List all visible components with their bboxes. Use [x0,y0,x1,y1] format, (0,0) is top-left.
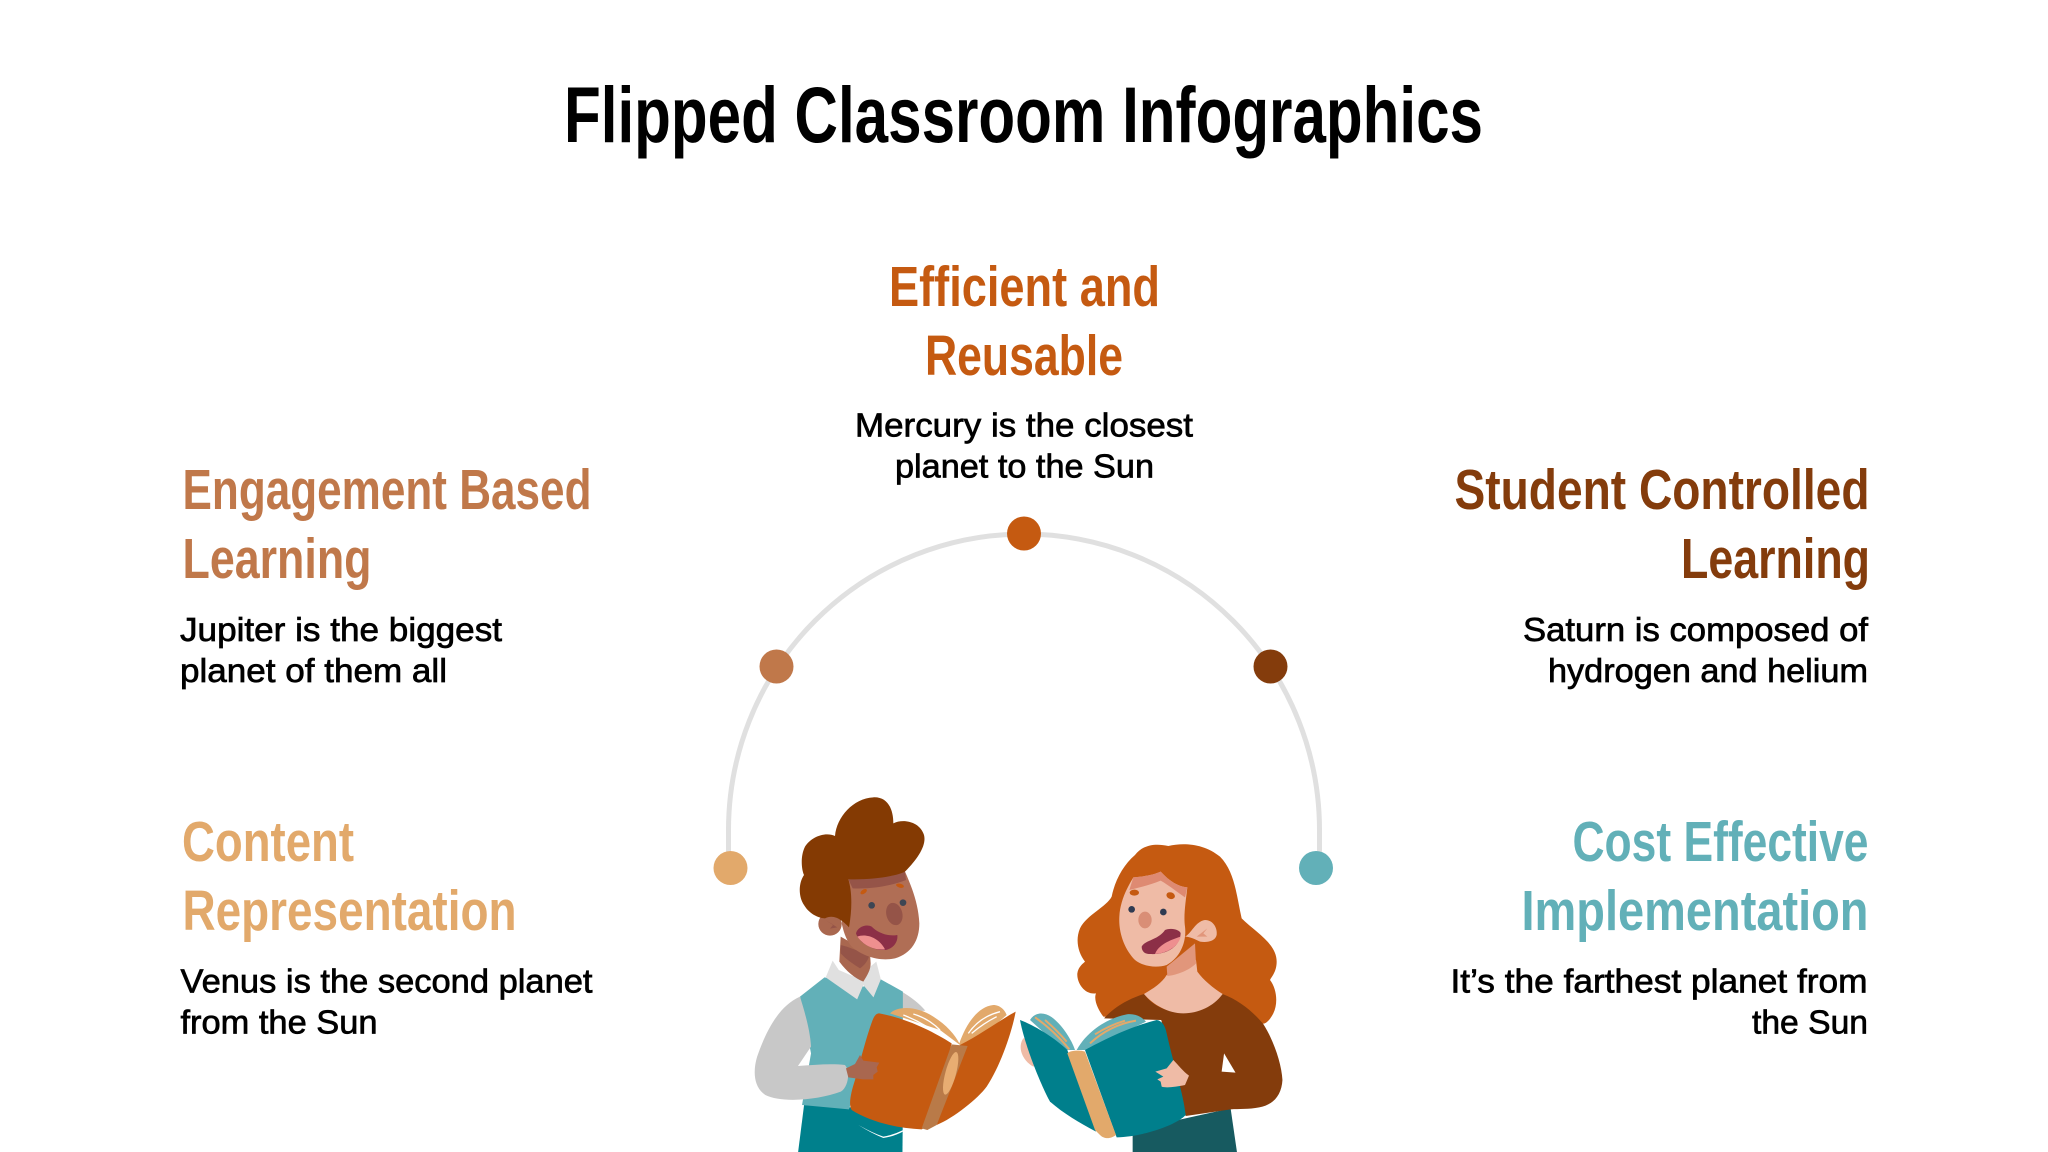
heading: efficient and reusable [889,255,1160,388]
dot: cost [1299,851,1333,885]
boy hand [846,1055,879,1079]
trouser crease [858,1125,903,1138]
heading: student controlled learning [1454,458,1870,591]
text: venus description: from the Sun [180,1004,378,1040]
teal book [1020,1014,1189,1138]
panel: engagement based learning [180,458,592,689]
illustration: two students reading [755,797,1282,1152]
heading: student controlled learning: Learning [1681,527,1870,591]
boy hair [800,797,924,927]
girl head [1119,872,1223,1013]
text: neptune description: the Sun [1752,1004,1868,1040]
heading: cost effective implementation [1522,810,1868,943]
text: neptune description: It’s the farthest planet from [1450,962,1868,1000]
text: jupiter description: Jupiter is the biggest [180,611,502,648]
boy nose [884,901,905,927]
girl hair [1077,844,1277,1024]
text: saturn description: hydrogen and helium [1548,652,1868,689]
girl nose [1138,912,1152,928]
text: saturn description: Saturn is composed of [1523,611,1869,648]
heading: engagement based learning [182,458,592,591]
book pages [890,1005,1007,1050]
girl left hand [1021,1038,1040,1067]
panel: content representation [180,810,592,1040]
book pages [1030,1014,1075,1050]
text: neptune description [1450,962,1868,1040]
panel: student controlled learning [1454,458,1870,689]
text: mercury description: Mercury is the closest [855,406,1193,444]
book spine [1067,1051,1116,1138]
text: jupiter description: planet of them all [180,652,447,689]
heading: engagement based learning: Learning [182,527,372,591]
boy neck [839,937,871,982]
orange book [846,1005,1016,1138]
boy head [800,797,924,982]
heading: efficient and reusable: Efficient and [889,255,1160,319]
heading: efficient and reusable: Reusable [925,324,1123,388]
girl neck and chest [1144,960,1223,1013]
boy with orange book [755,797,1016,1152]
dot: efficient [1007,516,1041,550]
girl with teal book [1020,844,1282,1152]
dot: content [714,851,748,885]
text: mercury description [855,406,1193,484]
boy mouth [856,925,897,950]
dot: student [1254,650,1288,684]
text: venus description: Venus is the second planet [180,962,592,1000]
text: jupiter description [180,611,502,689]
text: saturn description [1523,611,1869,689]
girl brows and eyes [1128,890,1176,915]
heading: content representation [182,810,516,943]
panel: cost effective implementation [1450,810,1868,1040]
girl right hand [1155,1060,1189,1087]
boy ear [818,912,842,936]
book spine [922,1044,968,1130]
arc with timeline dots [714,516,1333,885]
heading: cost effective implementation: Cost Effective [1572,810,1868,874]
boy face [842,872,919,959]
title: Flipped Classroom Infographics [564,70,1483,159]
text: venus description [180,962,592,1040]
heading: content representation: Content [182,810,354,874]
dot: engagement [760,650,794,684]
book cover [850,1013,952,1129]
boy brows and eyes [860,883,906,909]
girl trousers and sweater [1104,994,1282,1152]
book cover [1020,1020,1096,1132]
heading: engagement based learning: Engagement Based [182,458,592,522]
girl ear [1185,920,1217,942]
heading: content representation: Representation [182,879,516,943]
girl mouth [1142,929,1181,954]
panel: efficient and reusable [855,255,1193,484]
boy body [755,961,925,1152]
heading: cost effective implementation: Implementation [1522,879,1868,943]
girl face [1119,872,1187,967]
text: mercury description: planet to the Sun [895,448,1154,484]
heading: student controlled learning: Student Controlled [1454,458,1870,522]
